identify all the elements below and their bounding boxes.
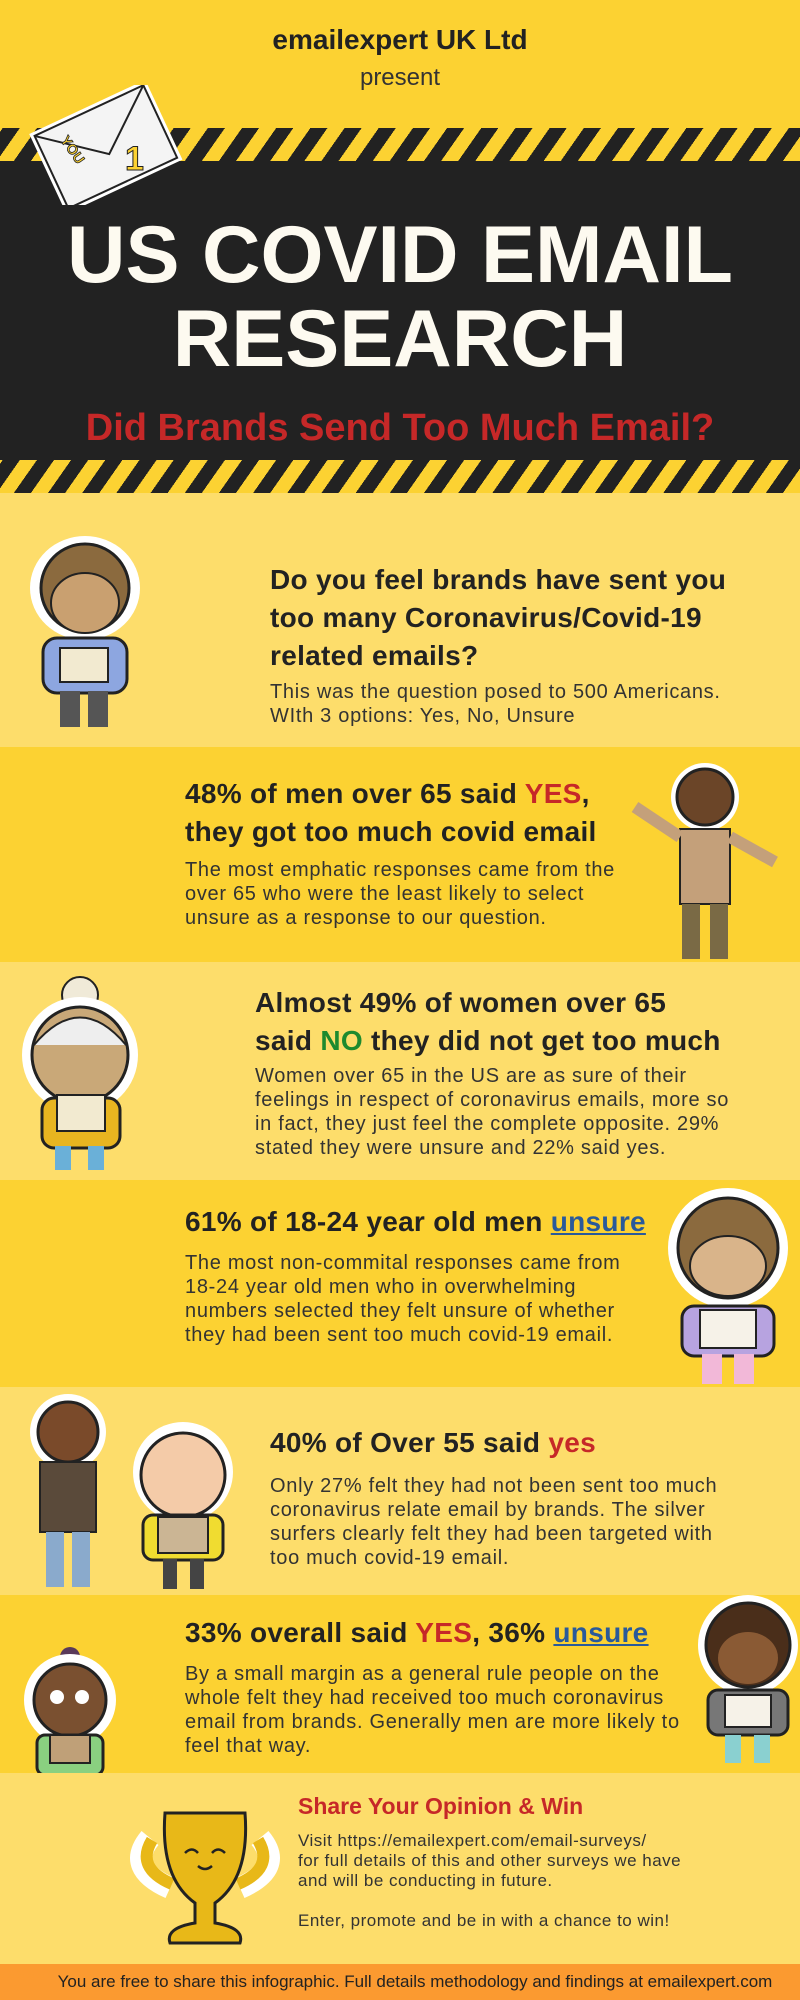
present: present bbox=[360, 64, 440, 91]
main title bbox=[67, 210, 733, 384]
body: Only 27% felt they had not been sent too much bbox=[270, 1475, 717, 1497]
question body: This was the question posed to 500 Americans. bbox=[270, 681, 721, 703]
body: feel that way. bbox=[185, 1735, 311, 1757]
body: email from brands. Generally men are more likely to bbox=[185, 1711, 680, 1733]
body: 18-24 year old men who in overwhelming bbox=[185, 1276, 576, 1298]
question heading bbox=[270, 564, 726, 671]
heading: 61% of 18-24 year old men unsure bbox=[185, 1206, 646, 1237]
section 7: share and win bbox=[0, 1773, 800, 1965]
heading: Share Your Opinion & Win bbox=[298, 1793, 583, 1819]
section 4: 18-24 men bbox=[0, 1180, 800, 1387]
icon: trophy bbox=[130, 1812, 280, 1944]
body: too much covid-19 email. bbox=[270, 1547, 509, 1569]
body: in fact, they just feel the complete opposite. 29% bbox=[255, 1113, 719, 1135]
body: they had been sent too much covid-19 email. bbox=[185, 1324, 613, 1346]
heading: 48% of men over 65 said YES, bbox=[185, 778, 590, 809]
footer bbox=[0, 1964, 800, 2000]
section 5: over 55 bbox=[0, 1387, 800, 1595]
body: over 65 who were the least likely to select bbox=[185, 883, 584, 905]
heading: 33% overall said YES, 36% unsure bbox=[185, 1617, 649, 1648]
body: for full details of this and other surveys we have bbox=[298, 1851, 681, 1870]
heading: said NO they did not get too much bbox=[255, 1025, 721, 1056]
question heading: related emails? bbox=[270, 640, 478, 671]
character: grandma bbox=[22, 976, 138, 1170]
body: feelings in respect of coronavirus emails, more so bbox=[255, 1089, 729, 1111]
heading: Almost 49% of women over 65 bbox=[255, 987, 666, 1018]
body: coronavirus relate email by brands. The silver bbox=[270, 1499, 705, 1521]
main title: RESEARCH bbox=[173, 294, 627, 384]
icon: you have mail envelope bbox=[29, 85, 182, 205]
body bbox=[270, 1475, 717, 1569]
body bbox=[185, 859, 615, 929]
question heading: Do you feel brands have sent you bbox=[270, 564, 726, 595]
body bbox=[255, 1065, 729, 1159]
heading: 40% of Over 55 said yes bbox=[270, 1427, 596, 1458]
body bbox=[298, 1831, 681, 1930]
body: Women over 65 in the US are as sure of their bbox=[255, 1065, 687, 1087]
heading bbox=[185, 778, 597, 847]
icon: you have mail envelope: 1 bbox=[125, 140, 144, 178]
question heading: too many Coronavirus/Covid-19 bbox=[270, 602, 702, 633]
body: Visit https://emailexpert.com/email-surveys/ bbox=[298, 1831, 647, 1850]
character: small boy bbox=[698, 1595, 798, 1763]
body bbox=[185, 1663, 680, 1757]
dark title band bbox=[0, 128, 800, 493]
character: young man bbox=[668, 1188, 788, 1384]
body: By a small margin as a general rule people on the bbox=[185, 1663, 660, 1685]
section 6: overall bbox=[0, 1595, 800, 1773]
section 2: men over 65 bbox=[0, 747, 800, 962]
footer text: You are free to share this infographic. Full details methodology and findings at emailexpert.com bbox=[58, 1972, 772, 1991]
body: numbers selected they felt unsure of whether bbox=[185, 1300, 615, 1322]
characters: grandpa and grandma bbox=[30, 1394, 233, 1589]
body: whole felt they had received too much coronavirus bbox=[185, 1687, 664, 1709]
question body: WIth 3 options: Yes, No, Unsure bbox=[270, 705, 575, 727]
body: stated they were unsure and 22% said yes. bbox=[255, 1137, 666, 1159]
heading bbox=[255, 987, 721, 1056]
section 1: question bbox=[0, 493, 800, 747]
body: The most emphatic responses came from the bbox=[185, 859, 615, 881]
body: The most non-commital responses came from bbox=[185, 1252, 621, 1274]
body: surfers clearly felt they had been targeted with bbox=[270, 1523, 713, 1545]
character: boy with envelope bbox=[30, 536, 140, 727]
heading: they got too much covid email bbox=[185, 816, 597, 847]
body: unsure as a response to our question. bbox=[185, 907, 547, 929]
subtitle: Did Brands Send Too Much Email? bbox=[86, 407, 714, 449]
section 3: women over 65 bbox=[0, 962, 800, 1180]
question body bbox=[270, 681, 721, 727]
body: Enter, promote and be in with a chance to win! bbox=[298, 1911, 670, 1930]
header top band bbox=[0, 0, 800, 130]
company name: emailexpert UK Ltd bbox=[272, 24, 528, 55]
icon: you have mail envelope: YOU bbox=[58, 133, 88, 167]
main title: US COVID EMAIL bbox=[67, 210, 733, 300]
character: girl bbox=[24, 1647, 116, 1773]
character: shouting old man bbox=[632, 763, 778, 959]
body: and will be conducting in future. bbox=[298, 1871, 553, 1890]
body bbox=[185, 1252, 621, 1346]
